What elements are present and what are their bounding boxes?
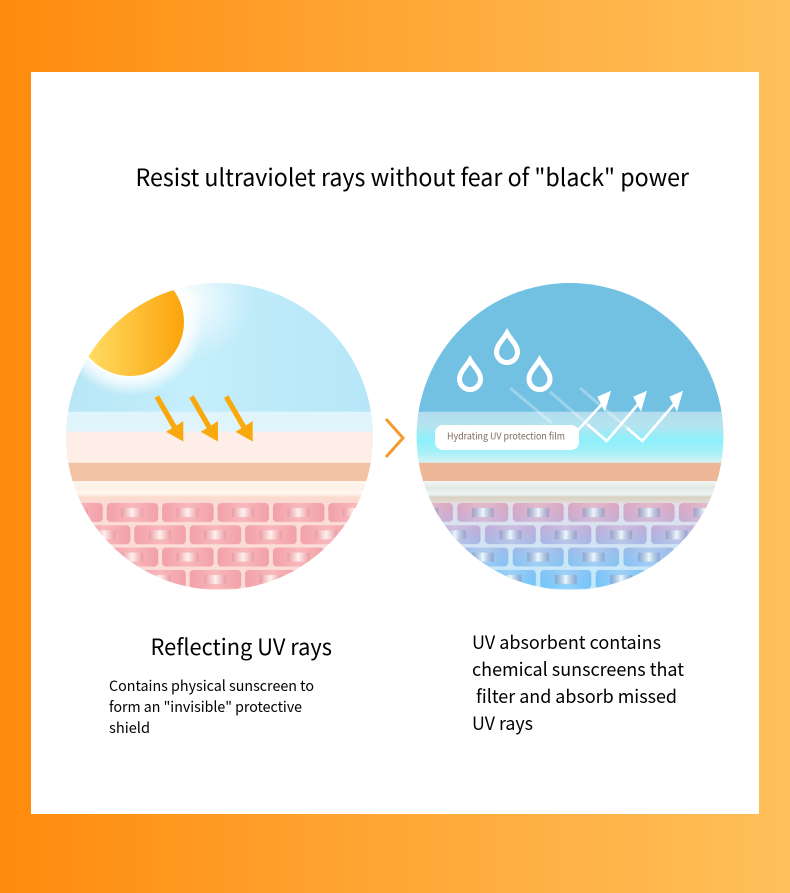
right description: chemical sunscreens that bbox=[472, 656, 684, 682]
arrow 3 bbox=[224, 395, 253, 442]
arrow head 2 bbox=[633, 391, 647, 412]
right description bbox=[472, 629, 684, 736]
film layer bbox=[66, 412, 374, 432]
right description: UV rays bbox=[472, 710, 533, 736]
orange arrows pointing down into skin bbox=[155, 395, 253, 442]
right description: UV absorbent contains bbox=[472, 629, 661, 655]
left description: form an "invisible" protective bbox=[109, 696, 302, 717]
drop 2 bbox=[496, 333, 518, 363]
sun glow bbox=[80, 287, 199, 394]
sky bbox=[416, 283, 724, 412]
chevron arrow between circles bbox=[386, 419, 403, 457]
arrow head 1 bbox=[597, 391, 611, 412]
skin cells bbox=[432, 503, 708, 590]
sky bbox=[66, 283, 374, 412]
upper skin layer bbox=[66, 432, 374, 463]
left heading: Reflecting UV rays bbox=[150, 630, 332, 662]
label pill bbox=[435, 425, 579, 450]
tan skin layer bbox=[66, 463, 374, 481]
faded incoming rays bbox=[510, 388, 627, 428]
drop 3 bbox=[529, 360, 550, 390]
skin cells bbox=[81, 503, 358, 590]
sun bbox=[88, 290, 184, 376]
left description bbox=[109, 675, 314, 738]
left description: Contains physical sunscreen to bbox=[109, 675, 314, 696]
pale skin layer bbox=[66, 481, 374, 503]
film label bbox=[435, 425, 579, 450]
arrow head 3 bbox=[669, 391, 683, 412]
label text: Hydrating UV protection film bbox=[447, 428, 565, 442]
arrow 1 bbox=[155, 395, 183, 442]
zigzag arrow lines bbox=[578, 402, 676, 441]
upper sky highlight bbox=[178, 283, 242, 351]
skin cells base colour bbox=[432, 503, 708, 590]
right description: filter and absorb missed bbox=[476, 683, 677, 709]
white panel bbox=[31, 72, 759, 814]
tan skin layer bbox=[416, 463, 724, 481]
right circle: absorbing illustration bbox=[416, 283, 724, 593]
reflected UV arrows bbox=[510, 388, 683, 441]
left circle: reflecting illustration bbox=[66, 283, 373, 590]
hydrating film layer bbox=[416, 412, 724, 463]
left description: shield bbox=[109, 717, 150, 738]
pale skin layer bbox=[416, 481, 724, 503]
arrow 2 bbox=[189, 395, 218, 442]
title: Resist ultraviolet rays without fear of "black" power bbox=[136, 158, 690, 193]
water drops bbox=[460, 333, 550, 390]
drop 1 bbox=[460, 360, 480, 390]
